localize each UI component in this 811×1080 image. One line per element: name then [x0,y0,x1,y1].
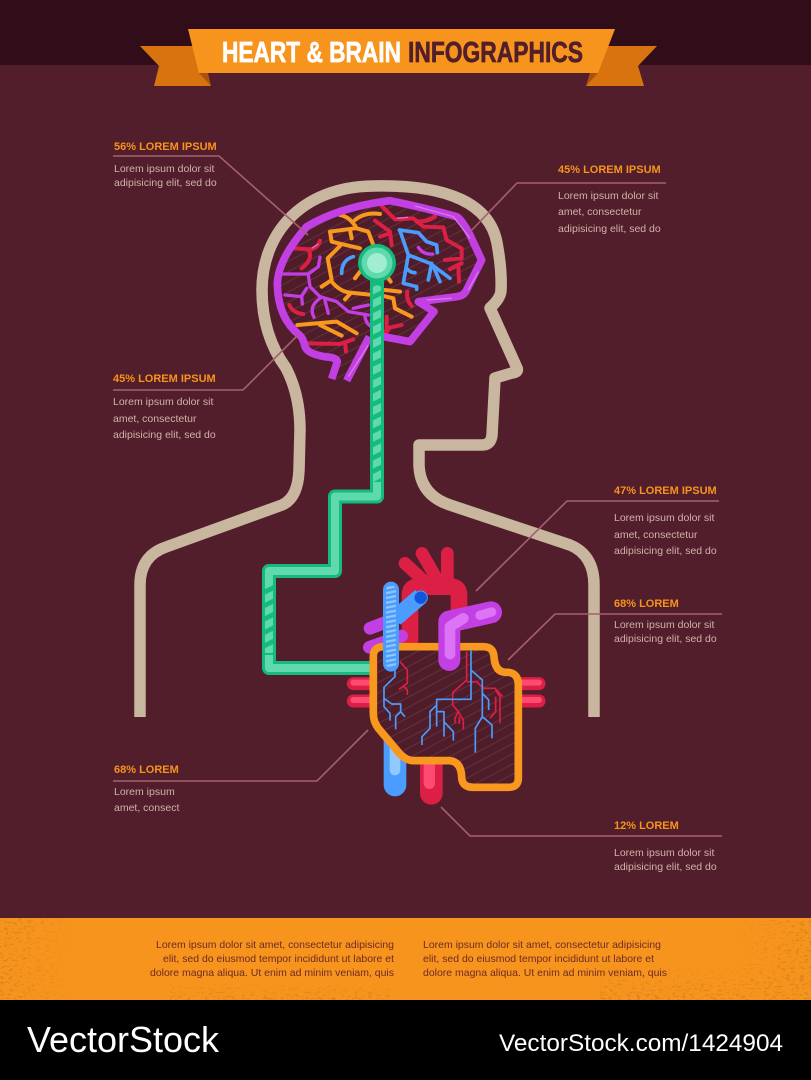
striped blue vessel [383,582,399,672]
heart body [373,647,518,787]
footer text right: dolore magna aliqua. Ut enim ad minim veniam, quis [423,967,667,979]
footer text right [423,939,667,979]
lower blue and red vessels [395,737,431,793]
black watermark strip: VectorStock.com/1424904 [499,1030,783,1057]
blue veins [342,230,450,289]
callout: 68% right: adipisicing elit, sed do [614,633,717,645]
brain [277,201,482,381]
callout: 47%: amet, consectetur [614,529,698,541]
callout: 12% [441,807,722,873]
green nerve line [265,280,381,668]
callout: 45% left: amet, consectetur [113,413,197,425]
callout: 45% left: adipisicing elit, sed do [113,429,216,441]
callout: 56% [113,141,308,235]
purple veins [282,247,433,327]
callout: 45% right: 45% LOREM IPSUM [558,164,661,176]
callout: 68% right: 68% LOREM [614,598,679,610]
blue diagonal vessel [395,596,421,618]
callout: 47%: adipisicing elit, sed do [614,545,717,557]
callout: 68% left: Lorem ipsum [114,786,175,798]
callout: 68% left: 68% LOREM [114,764,179,776]
footer text right: elit, sed do eiusmod tempor incididunt ut labore et [423,953,654,965]
footer text left [150,939,394,979]
footer text left: Lorem ipsum dolor sit amet, consectetur adipisicing [156,939,394,951]
side red vessels [353,683,539,701]
callout: 45% right: amet, consectetur [558,206,642,218]
green node on brain [358,244,396,288]
callout: 45% left [113,335,298,441]
orange veins [297,213,412,336]
blue heart veins [384,650,492,753]
top dark bar [0,0,811,65]
callout: 47%: 47% LOREM IPSUM [614,485,717,497]
footer text left: dolore magna aliqua. Ut enim ad minim veniam, quis [150,967,394,979]
footer text right: Lorem ipsum dolor sit amet, consectetur adipisicing [423,939,661,951]
callout: 45% left: Lorem ipsum dolor sit [113,396,213,408]
red veins [289,206,462,352]
callout: 68% right: Lorem ipsum dolor sit [614,619,714,631]
title ribbon [140,29,657,86]
callout: 12%: Lorem ipsum dolor sit [614,847,714,859]
callout: 47% [476,485,719,591]
callout: 56%: Lorem ipsum dolor sit [114,163,214,175]
red heart veins [399,652,503,729]
blue vessel opening [414,591,427,604]
title: HEART & BRAIN [222,37,401,69]
footer text left: elit, sed do eiusmod tempor incididunt ut labore et [163,953,394,965]
callout: 12%: 12% LOREM [614,820,679,832]
callout: 68% left [113,730,368,814]
callout: 45% left: 45% LOREM IPSUM [113,373,216,385]
orange footer band [0,918,811,1000]
title: INFOGRAPHICS [408,37,583,69]
callout: 12%: adipisicing elit, sed do [614,861,717,873]
brain highlights [312,206,478,377]
callout: 68% right [508,598,722,660]
callout: 45% right: adipisicing elit, sed do [558,223,661,235]
black watermark strip: VectorStock [27,1019,220,1060]
aorta [405,553,459,647]
callout: 47%: Lorem ipsum dolor sit [614,512,714,524]
callout: 56%: adipisicing elit, sed do [114,177,217,189]
brain outline [277,201,482,381]
purple vessel [449,612,492,660]
callout: 56%: 56% LOREM IPSUM [114,141,217,153]
brain fill and outline [277,201,482,380]
heart [353,553,539,793]
black watermark strip [0,1000,811,1080]
callout: 45% right [470,164,666,235]
purple back vessels [369,616,402,647]
callout: 68% left: amet, consect [114,802,179,814]
callout: 45% right: Lorem ipsum dolor sit [558,190,658,202]
body outline [140,186,594,717]
